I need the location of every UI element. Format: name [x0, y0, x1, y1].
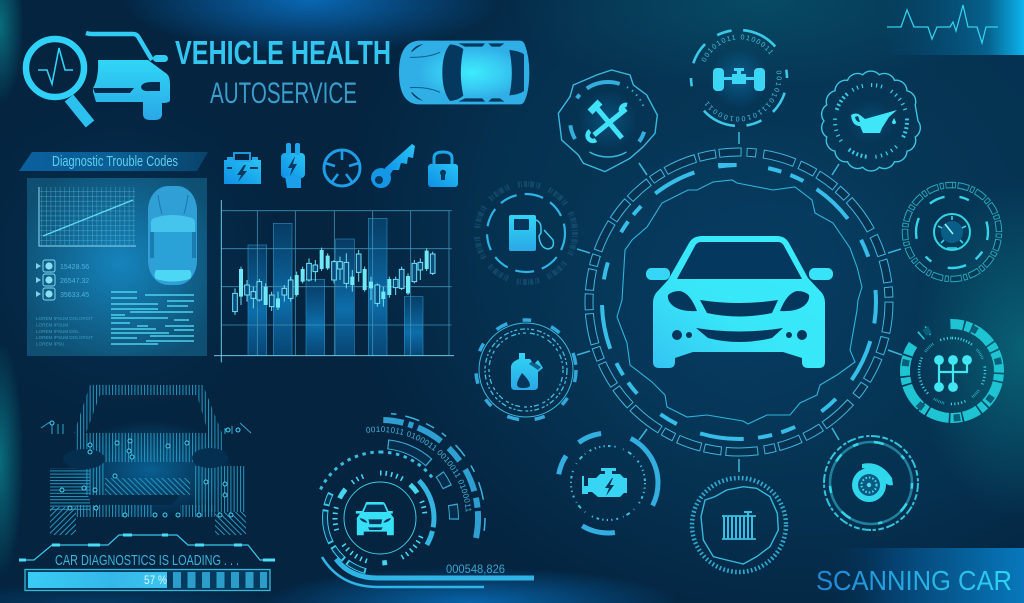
dial: speedometer: [905, 185, 999, 279]
left body: [50, 468, 90, 510]
lorem ipsum text: LOREM IPSU: [36, 342, 64, 346]
dial: oil can: [822, 71, 920, 171]
dial: fuel pump: [477, 184, 575, 282]
irregular inner ring: [617, 180, 862, 424]
dial: radiator: [692, 478, 786, 572]
outer arc: [380, 420, 478, 538]
upper grille: [76, 433, 222, 462]
dial: engine: [558, 433, 658, 533]
readouts: [36, 260, 89, 300]
icon: battery: [224, 153, 261, 184]
dial: axle: [690, 28, 788, 128]
icon: wheel: [324, 150, 360, 186]
lorem ipsum text: LOREM IPSUM DOL: [36, 329, 79, 334]
bottom-left diagonal: [50, 507, 76, 535]
icon: top view car: [399, 41, 529, 104]
panel: top-right corner band: [880, 0, 1024, 55]
loading frame wire: [19, 535, 275, 560]
circuit board car: [41, 385, 251, 535]
candlestick and bar chart: [214, 200, 454, 362]
small car scanner dial: 00101011 0100011 0010011 0100011: [366, 426, 472, 512]
icon: key: [371, 144, 415, 188]
icon: padlock: [428, 152, 458, 187]
car side silhouette: [86, 33, 170, 120]
lorem ipsum text: LOREM IPSUM: [36, 322, 68, 328]
right body: [195, 466, 246, 512]
lorem ipsum text: [36, 316, 93, 346]
outlined segment ring: [570, 133, 908, 471]
dial: gear shift: [905, 324, 999, 418]
icon: large front car: [646, 236, 833, 368]
central scanner ring: [570, 133, 908, 471]
filled dash ring: [602, 165, 876, 439]
panel header: Diagnostic Trouble Codes: [19, 152, 208, 171]
readouts: 26547.32: [60, 278, 89, 285]
circuit nodes: [50, 421, 240, 517]
tick ring: [335, 473, 425, 563]
loading progress bar: [25, 570, 270, 590]
panel: scanning car: [816, 548, 1024, 603]
icon: crossed hammer and wrench: [588, 102, 627, 141]
title line 2: AUTOSERVICE: [210, 77, 357, 110]
loading progress bar: 57 %: [144, 573, 167, 587]
icon: brake disc: [852, 463, 893, 502]
icon row: [224, 143, 458, 188]
readouts: 35633.45: [60, 292, 89, 299]
readouts: 15428.56: [60, 264, 89, 271]
icon: plug: [281, 143, 305, 188]
candlesticks: [235, 248, 433, 315]
dial: axle: 0010101110100100011: [705, 70, 782, 122]
outlined box arcs: [380, 444, 454, 530]
icon: engine: [582, 468, 627, 497]
small car scanner dial: [319, 412, 486, 574]
dial: brake disc: [824, 436, 918, 530]
connector lines: [577, 132, 902, 472]
icon: axle: [713, 68, 765, 91]
panel: diagnostic trouble codes: [27, 178, 207, 356]
icon: gauge: [934, 214, 970, 250]
dotted arc: [314, 452, 446, 584]
title line 1: VEHICLE HEALTH: [175, 34, 391, 71]
loading label: CAR DIAGNOSTICS IS LOADING . . .: [55, 552, 239, 569]
icon: oil can: [851, 110, 897, 133]
mirrors: [41, 422, 251, 434]
icon: car top view small: [148, 186, 197, 285]
dial: axle: 00101011 0100011: [702, 34, 773, 62]
heartbeat pulse line: [887, 5, 998, 43]
lower stripes: [76, 505, 152, 517]
roof band: [74, 385, 222, 433]
bars: [248, 218, 423, 356]
lorem ipsum text: LOREM IPSUM DOLORSIT: [36, 316, 93, 321]
thick right arc: [326, 464, 434, 572]
icon: jug: [511, 353, 543, 390]
line chart: [39, 187, 136, 246]
bottom sweep lines: [322, 557, 534, 587]
binary text: [366, 432, 466, 518]
icon: magnifier with car: [26, 33, 170, 124]
left outlined arc: [325, 463, 435, 573]
dial: tools: [558, 70, 657, 172]
panel header: Diagnostic Trouble Codes: Diagnostic Trouble Codes: [52, 153, 178, 170]
icon: fuel pump: [509, 215, 553, 251]
icon: small car: [356, 502, 394, 535]
headlight gaps: [63, 449, 105, 469]
title: [175, 34, 391, 110]
dial: oil jug: [476, 320, 576, 420]
lorem ipsum text: LOREM IPSUM DOLORSIT: [36, 335, 93, 340]
data lines: [111, 292, 194, 344]
counter value: 000548,826: [446, 562, 505, 576]
bottom gap: [87, 495, 180, 505]
lower middle: [105, 478, 190, 495]
icon: radiator: [722, 512, 756, 539]
icon: shift pattern: [935, 356, 971, 391]
